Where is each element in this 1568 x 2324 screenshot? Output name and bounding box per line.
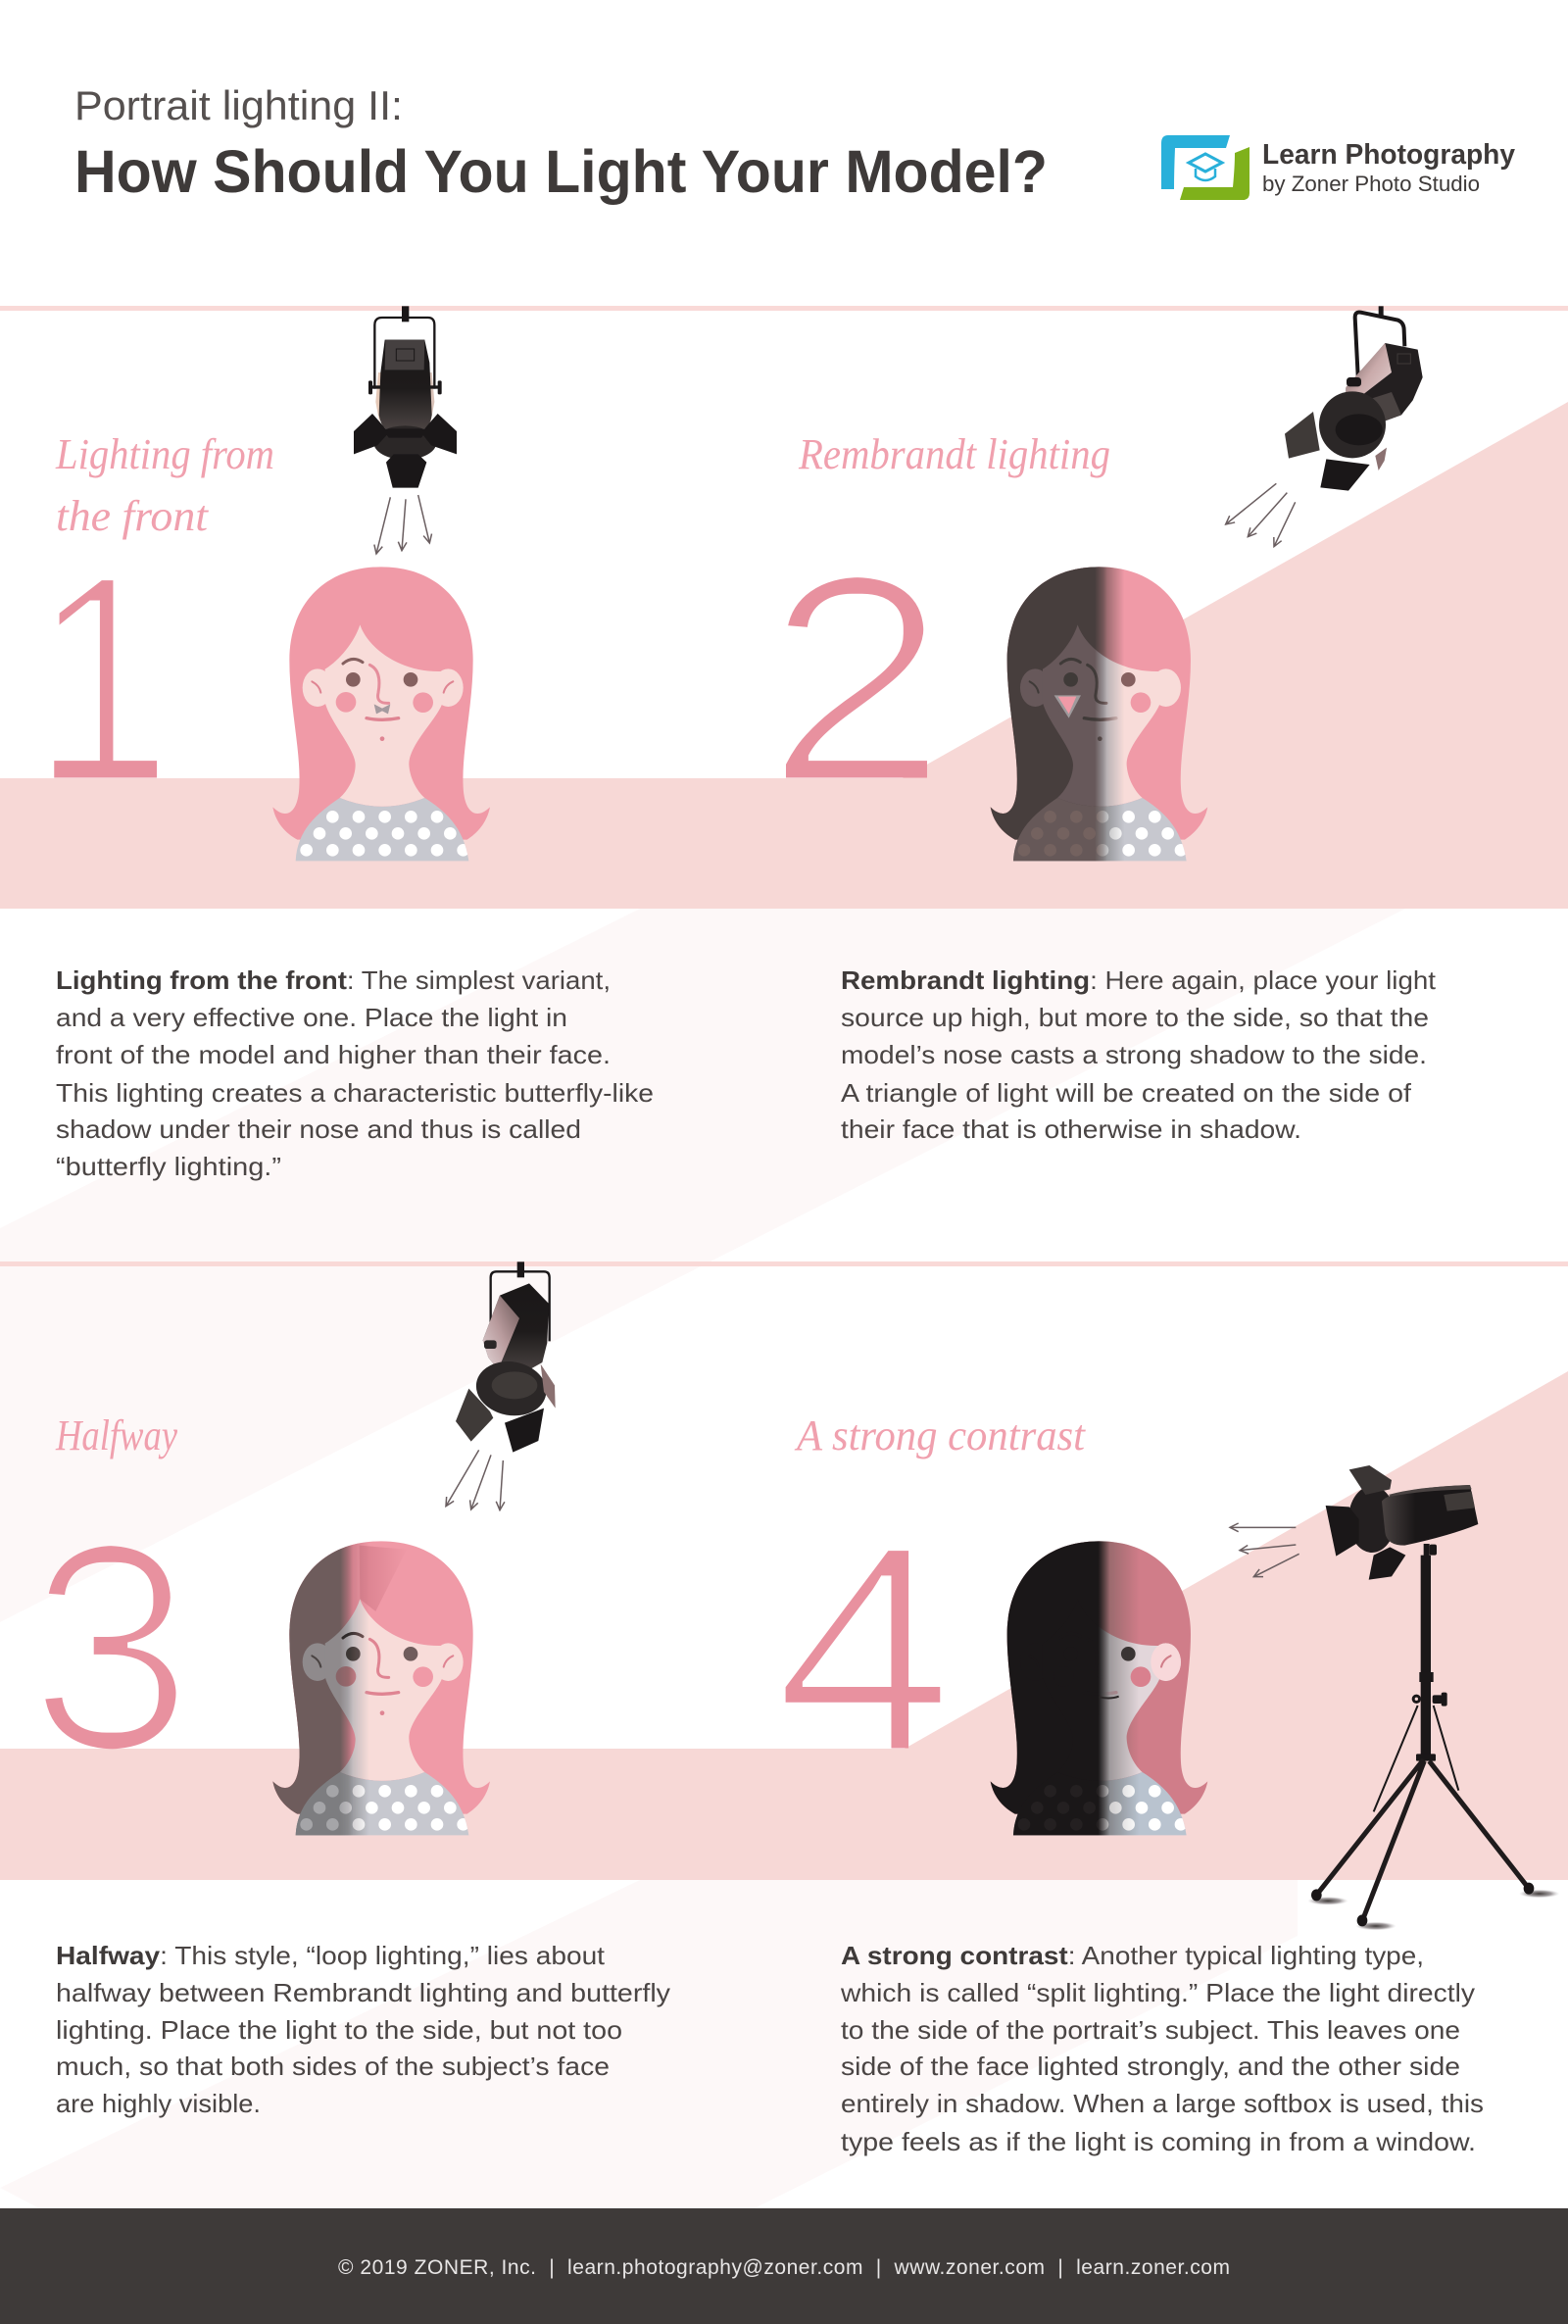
panel 4 text: to the side of the portrait’s subject. This leaves one xyxy=(841,2015,1460,2045)
light 3: three-quarter spotlight with arrows xyxy=(446,1261,556,1510)
footer bar xyxy=(0,2208,1568,2324)
pink floor and diagonal: lower row xyxy=(0,1371,1568,1880)
panel 4 text: side of the face lighted strongly, and the other side xyxy=(841,2052,1460,2081)
number 1: 1 xyxy=(29,514,174,843)
panel 4 text xyxy=(840,1941,1484,2156)
logo wordmark: Learn Photography xyxy=(1262,139,1515,171)
butterfly shadow xyxy=(374,704,390,714)
panel 2 text: their face that is otherwise in shadow. xyxy=(841,1114,1301,1144)
panel 3 text: are highly visible. xyxy=(56,2089,261,2118)
panel 3 text: much, so that both sides of the subject’s face xyxy=(56,2052,610,2081)
lamp xyxy=(1348,1486,1396,1553)
footer text: © 2019 ZONER, Inc. | learn.photography@zoner.com | www.zoner.com | learn.zoner.com xyxy=(338,2256,1230,2279)
panel 1 text: This lighting creates a characteristic butterfly-like xyxy=(56,1078,654,1108)
panel 2 text: source up high, but more to the side, so that the xyxy=(841,1003,1429,1032)
handwritten heading 2: Rembrandt lighting xyxy=(798,430,1110,478)
logo: Learn Photography by Zoner Photo Studio xyxy=(1161,135,1515,200)
handwritten heading 3: Halfway xyxy=(55,1411,177,1459)
panel 3 text: halfway between Rembrandt lighting and butterfly xyxy=(56,1978,670,2007)
light 1: overhead spotlight with arrows xyxy=(354,306,457,554)
background: faint diagonal stripe behind upper text and section 3 xyxy=(0,909,1405,1622)
stand xyxy=(1412,1544,1447,1761)
light 4: studio light on tripod stand with arrows xyxy=(1230,1465,1559,1930)
panel 2 text: A triangle of light will be created on the side of xyxy=(841,1078,1412,1108)
panel 2 text: Rembrandt lighting : Here again, place your light xyxy=(841,965,1437,995)
panel 1 text: shadow under their nose and thus is called xyxy=(56,1114,581,1144)
number 3: 3 xyxy=(28,1482,194,1811)
portrait 3: loop lighting xyxy=(272,1541,490,1835)
logo icon xyxy=(1161,135,1250,200)
floor shadows xyxy=(1307,1897,1348,1905)
logo tagline: by Zoner Photo Studio xyxy=(1262,172,1480,196)
lit ear xyxy=(1151,1643,1181,1681)
panel 4: a strong contrast xyxy=(773,1411,1559,1930)
panel 1 text: front of the model and higher than their face. xyxy=(56,1040,611,1069)
handwritten heading 1: Lighting from xyxy=(55,430,274,478)
background: faint diagonal stripe behind lower text xyxy=(0,1880,1298,2208)
title block xyxy=(74,82,1048,205)
mouth in shadow xyxy=(1100,1697,1119,1699)
handwritten heading 1: the front xyxy=(56,492,210,540)
light 2: angled spotlight with arrows xyxy=(1226,306,1423,547)
panel 1 text xyxy=(56,965,654,1181)
hair shading wedge xyxy=(360,1546,407,1611)
panel 1 text: Lighting from the front : The simplest variant, xyxy=(56,965,611,995)
number 2: 2 xyxy=(764,514,949,843)
top divider line xyxy=(0,306,1568,311)
panel 1: lighting from the front xyxy=(29,306,490,861)
panel 1 text: and a very effective one. Place the light in xyxy=(56,1003,567,1032)
handwritten heading 1 xyxy=(55,430,274,540)
number 4: 4 xyxy=(773,1484,955,1813)
subtitle: Portrait lighting II: xyxy=(74,82,403,128)
panel 3: halfway xyxy=(28,1261,556,1835)
panel 2 text: model’s nose casts a strong shadow to the side. xyxy=(841,1040,1427,1069)
panel 4 text: which is called “split lighting.” Place the light directly xyxy=(840,1978,1475,2007)
main heading: How Should You Light Your Model? xyxy=(74,138,1048,205)
panel 3 text xyxy=(56,1941,670,2118)
pink floor and diagonal: upper row xyxy=(0,402,1568,909)
panel 3 text: Halfway : This style, “loop lighting,” lies about xyxy=(56,1941,606,1970)
portrait 4: split lighting xyxy=(991,1541,1207,1835)
middle divider line xyxy=(0,1261,1568,1266)
triangle of light on cheek xyxy=(1054,695,1081,718)
panel 4 text: type feels as if the light is coming in from a window. xyxy=(841,2127,1476,2156)
portrait 1: evenly lit face xyxy=(272,567,490,861)
panel 4 text: entirely in shadow. When a large softbox is used, this xyxy=(841,2089,1484,2118)
panel 3 text: lighting. Place the light to the side, but not too xyxy=(56,2015,622,2045)
panel 4 text: A strong contrast : Another typical lighting type, xyxy=(841,1941,1424,1970)
panel 1 text: “butterfly lighting.” xyxy=(56,1152,281,1181)
panel 2 text xyxy=(841,965,1437,1144)
handwritten heading 4: A strong contrast xyxy=(794,1411,1087,1459)
panel 2: Rembrandt lighting xyxy=(764,306,1423,861)
portrait 2: half shadow with light triangle xyxy=(991,567,1207,861)
